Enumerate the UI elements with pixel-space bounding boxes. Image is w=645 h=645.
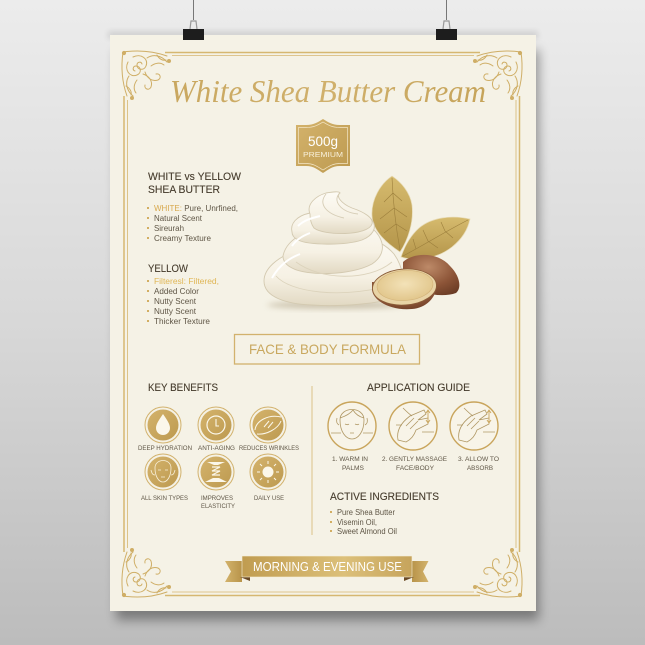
- list: white properties: Creamy Texture: [154, 234, 212, 243]
- icon: improves elasticity: IMPROVES: [201, 495, 233, 502]
- icon: all skin types: [141, 454, 188, 502]
- list: white properties: WHITE: Pure, Unrfined,: [154, 204, 238, 213]
- heading: white vs yellow: SHEA BUTTER: [148, 184, 220, 196]
- icon: daily use: DAILY USE: [254, 495, 284, 502]
- list: white properties: Sireurah: [154, 224, 184, 233]
- icon: deep hydration: DEEP HYDRATION: [138, 445, 192, 452]
- list: white properties: [147, 204, 238, 243]
- heading: white vs yellow: [148, 171, 242, 196]
- ornamental frame: [122, 51, 522, 597]
- step 3: allow to absorb: [450, 402, 499, 472]
- icon: deep hydration: [138, 407, 192, 452]
- heading: application guide: APPLICATION GUIDE: [367, 382, 470, 394]
- ribbon: morning and evening use: MORNING & EVENING USE: [253, 560, 402, 574]
- text block: yellow: [147, 263, 219, 326]
- step 1: warm in palms: 1. WARM IN: [332, 456, 368, 463]
- step 3: allow to absorb: ABSORB: [467, 465, 493, 472]
- heading: white vs yellow: WHITE vs YELLOW: [148, 171, 242, 183]
- title: White Shea Butter Cream: [170, 73, 486, 109]
- list: ingredients: [330, 508, 397, 536]
- corner ornament: bottom right: [474, 548, 522, 597]
- list: ingredients: Sweet Almond Oil: [337, 527, 397, 536]
- binder clip right: [436, 0, 457, 40]
- formula box: FACE & BODY FORMULA: [249, 341, 407, 357]
- step 1: warm in palms: [328, 402, 376, 472]
- list: yellow properties: Filteresl: Filtered,: [154, 277, 219, 286]
- ribbon: morning and evening use: [225, 556, 428, 582]
- heading: yellow: YELLOW: [148, 263, 189, 275]
- step 2: gently massage: 2. GENTLY MASSAGE: [382, 456, 447, 463]
- panel: application steps: [328, 402, 499, 472]
- step 2: gently massage: [382, 402, 447, 472]
- icon: reduces wrinkles: REDUCES WRINKLES: [239, 445, 299, 452]
- badge: 500g premium: [296, 119, 350, 173]
- list: yellow properties: Thicker Texture: [154, 317, 211, 326]
- list: yellow properties: Nutty Scent: [154, 307, 197, 316]
- heading: active ingredients: ACTIVE INGREDIENTS: [330, 491, 439, 503]
- leaf horizontal: [401, 217, 470, 259]
- text block: white vs yellow: [147, 171, 242, 243]
- list: yellow properties: [147, 277, 219, 326]
- poster shadow: [116, 50, 539, 620]
- list: yellow properties: Nutty Scent: [154, 297, 197, 306]
- formula box: [234, 334, 420, 364]
- illustration: shea cream with leaves and nuts: [264, 176, 470, 309]
- icon: anti-aging: [198, 407, 235, 452]
- list: ingredients: Pure Shea Butter: [337, 508, 395, 517]
- cream shadow: [267, 301, 403, 309]
- icon: daily use: [250, 454, 286, 502]
- corner ornament: bottom left: [122, 548, 170, 597]
- corner ornament: top right: [474, 51, 522, 100]
- list: white properties: Natural Scent: [154, 214, 203, 223]
- icon: anti-aging: ANTI-AGING: [198, 445, 235, 452]
- icon: all skin types: ALL SKIN TYPES: [141, 495, 188, 502]
- step 1: warm in palms: PALMS: [342, 465, 364, 472]
- icon: reduces wrinkles: [239, 407, 299, 452]
- badge: 500g premium: 500g: [308, 134, 338, 149]
- icon: improves elasticity: [198, 454, 235, 510]
- leaf upright: [372, 176, 412, 252]
- badge: 500g premium: PREMIUM: [303, 150, 343, 159]
- binder clip left: [183, 0, 204, 40]
- heading: key benefits: KEY BENEFITS: [148, 382, 218, 394]
- cream swirl: [264, 192, 403, 306]
- corner ornament: top left: [122, 51, 170, 100]
- panel: key benefits icons: [138, 407, 299, 510]
- step 3: allow to absorb: 3. ALLOW TO: [458, 456, 499, 463]
- column divider: [311, 386, 313, 535]
- icon: improves elasticity: ELASTICITY: [201, 503, 235, 510]
- list: yellow properties: Added Color: [154, 287, 199, 296]
- whole shea nut: [403, 255, 459, 295]
- poster top shadow: [108, 31, 538, 39]
- text block: active ingredients: [330, 491, 439, 536]
- step 2: gently massage: FACE/BODY: [396, 465, 434, 472]
- halved shea nut: [371, 267, 438, 309]
- list: ingredients: Visemin Oil,: [337, 518, 377, 527]
- poster paper: [110, 35, 536, 611]
